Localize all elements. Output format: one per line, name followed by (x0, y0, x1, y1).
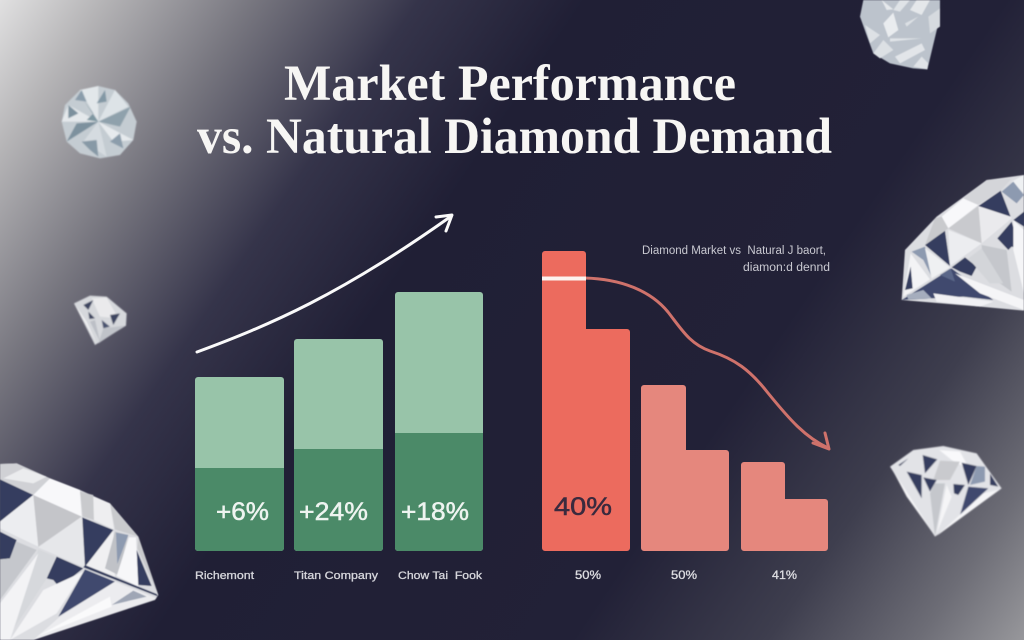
bar: second red stepped (641, 385, 729, 551)
bar: first red stepped (542, 251, 630, 551)
legend text: Diamond Market vs Natural J baort, (642, 245, 826, 257)
value: 40%: 40% (554, 493, 612, 521)
bar: Chow Tai Fook (395, 292, 483, 551)
company labels: Richemont (195, 570, 254, 582)
bar: Richemont: +6% (216, 498, 269, 526)
percent labels: 50% (575, 570, 601, 582)
company labels: Chow Tai Fook (398, 570, 483, 582)
chart: green company bars (195, 292, 483, 551)
company labels (195, 570, 483, 582)
legend text (642, 245, 830, 274)
arrow: rising white trend (197, 215, 452, 352)
percent labels: 41% (772, 570, 797, 582)
icon: diamond bottom right (890, 446, 1002, 537)
bar: Richemont (195, 377, 284, 551)
icon: large diamond bottom left (0, 463, 158, 640)
company labels: Titan Company (294, 570, 379, 582)
marker: white line on first red bar (542, 276, 586, 280)
bar: Titan Company (294, 339, 383, 551)
arrow: falling red trend (585, 278, 829, 449)
title (197, 56, 832, 165)
icon: round diamond top left (62, 86, 137, 158)
bar: Chow Tai Fook: +18% (401, 498, 469, 526)
bar: third red stepped (741, 462, 828, 551)
icon: small diamond left (74, 296, 127, 345)
icon: large diamond right (902, 175, 1024, 311)
title: Market Performance (284, 56, 736, 112)
legend text: diamon:d dennd (743, 262, 830, 274)
icon: rough diamond top right (860, 0, 940, 69)
bar: Titan Company: +24% (299, 498, 368, 526)
percent labels (575, 570, 797, 582)
percent labels: 50% (671, 570, 697, 582)
chart: red stepped bars (542, 251, 828, 551)
title: vs. Natural Diamond Demand (197, 109, 832, 165)
